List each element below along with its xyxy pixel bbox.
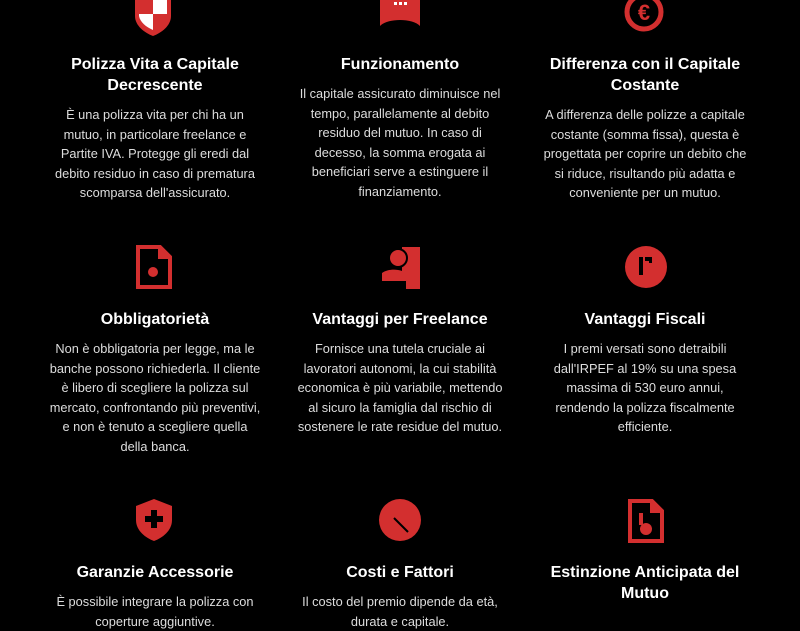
cell: Funzionamento [300,56,500,198]
text: lavoratori autonomi, la cui stabilità [304,360,496,376]
text [55,107,255,200]
cell: Costi e Fattori [302,564,498,628]
title [551,564,739,602]
text: e non è tenuto a scegliere quella [62,419,247,434]
icon: user [382,247,420,289]
cell: Vantaggi per Freelance [298,311,502,434]
text: residuo del mutuo. In caso di [318,125,482,140]
text: finanziamento. [358,184,442,198]
text: si riduce, risultando più adatta e [555,166,735,180]
cell: Differenza [544,56,746,200]
text: progettata per coprire un debito che [544,146,746,161]
title: Differenza con il Capitale [550,56,740,73]
text: rendendo la polizza fiscalmente [555,400,735,414]
icon: shield plus [136,499,172,541]
icon: checkered shield [135,0,171,36]
text: sostenere le rate residue del mutuo. [298,419,502,434]
text [554,341,736,434]
text [50,341,260,454]
text: Partite IVA. Protegge gli eredi dal [61,146,249,161]
title: Estinzione Anticipata del [551,564,739,581]
title: Vantaggi per Freelance [312,311,488,328]
title [71,56,239,94]
icon: gauge circle [379,499,421,541]
text: Il capitale assicurato diminuisce nel [300,86,500,101]
icon: building [380,0,420,26]
text: efficiente. [618,419,672,434]
cell: Polizza Vita [55,56,255,200]
text: economica è più variabile, mettendo [298,380,502,395]
text: mutuo, in particolare freelance e [64,126,246,142]
text: I premi versati sono detraibili [564,341,726,356]
text: beneficiari serve a estinguere il [312,164,488,179]
text: coperture aggiuntive. [95,614,215,628]
text: conveniente per un mutuo. [569,185,721,200]
title: Garanzie Accessorie [77,564,233,581]
cell: Estinzione Anticipata [551,564,739,602]
text [56,594,254,628]
text: al sicuro la famiglia dal rischio di [308,400,492,414]
text: È una polizza vita per chi ha un [66,107,244,122]
text [302,594,498,628]
title: Costante [611,77,679,94]
text: è libero di scegliere la polizza sul [61,380,249,395]
text: scomparsa dell'assicurato. [80,185,230,200]
text: È possibile integrare la polizza con [56,594,254,609]
text: decesso, la somma erogata ai [315,144,485,160]
text: Non è obbligatoria per legge, ma le [55,341,255,356]
icon: document 2 [628,499,664,543]
text: della banca. [120,438,190,454]
text: costante (somma fissa), questa è [551,126,739,142]
text [544,107,746,200]
cell: Vantaggi Fiscali [554,311,736,434]
text: A differenza delle polizze a capitale [545,107,745,122]
text: durata e capitale. [351,614,449,628]
title: Obbligatorietà [101,311,209,328]
text: tempo, parallelamente al debito [311,106,489,120]
icon: euro circle: € [638,0,650,25]
text: Il costo del premio dipende da età, [302,594,498,609]
text [298,341,502,434]
icon: circle mark [625,246,667,288]
text: massima di 530 euro annui, [566,380,724,395]
text: debito residuo in caso di prematura [55,166,255,180]
icon: document [136,245,172,289]
text: dall'IRPEF al 19% su una spesa [554,360,736,376]
text: banche possono richiederla. Il cliente [50,360,260,376]
title: Decrescente [107,77,203,94]
title: Polizza Vita a Capitale [71,56,239,73]
text: Fornisce una tutela cruciale ai [315,341,485,356]
cell: Obbligatorietà [50,311,260,454]
title: Costi e Fattori [346,564,454,581]
cell: Garanzie Accessorie [56,564,254,628]
title: Mutuo [621,585,669,602]
title [550,56,740,94]
title: Vantaggi Fiscali [585,311,705,328]
icon: euro circle [624,0,664,32]
title: Funzionamento [341,56,459,73]
text [300,86,500,198]
text: mercato, confrontando più preventivi, [50,400,260,414]
